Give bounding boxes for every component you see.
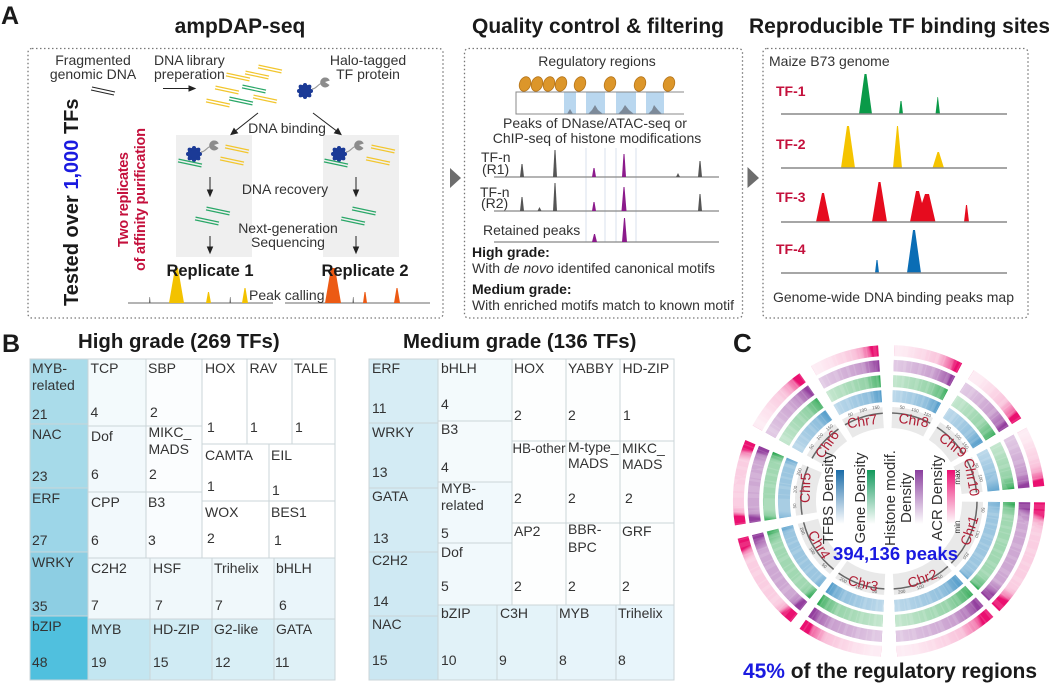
- cell: GATA: [274, 619, 335, 680]
- cell: YABBY: 2: [568, 407, 576, 423]
- sector: Chr3: 100: [855, 584, 864, 591]
- cell: MYB: 8: [559, 652, 567, 668]
- label: TF-1: TF-1: [776, 83, 806, 99]
- cell: Trihelix: [616, 605, 674, 680]
- panel: reproducible sites: [763, 48, 1028, 318]
- cell: GATA: GATA: [276, 621, 313, 637]
- chart: retained peaks: [592, 218, 627, 242]
- arrows: down: [208, 177, 358, 253]
- label: Chr2: Chr2: [905, 566, 939, 591]
- cell: RAV: [247, 359, 292, 444]
- sector: Chr10: 100: [977, 474, 984, 483]
- cell: TCP: TCP: [90, 360, 118, 376]
- cell: Dof: [88, 426, 146, 492]
- sector: Chr3: 50: [872, 589, 878, 594]
- sector: Chr2: [676, 288, 1049, 687]
- cell: BES1: 1: [274, 532, 282, 548]
- cell: EIL: EIL: [271, 447, 292, 463]
- cell: MYB: 19: [91, 654, 107, 670]
- cell: MYB: [557, 605, 616, 680]
- chart: replicate 1 peaks: [149, 268, 248, 303]
- cell: CPP: [88, 492, 146, 558]
- cell: SBP: [146, 359, 202, 426]
- sector: Chr7: 50: [847, 411, 854, 418]
- cell: bHLH: bHLH: [276, 560, 312, 576]
- arrow: step 1 to 2: [450, 168, 461, 188]
- cell: NAC: 23: [32, 468, 48, 484]
- cell: WRKY: WRKY: [32, 554, 75, 570]
- label: Chr9: Chr9: [936, 429, 970, 461]
- cell: WOX: [202, 501, 269, 558]
- cell: Dof: Dof: [441, 544, 463, 560]
- cell: MYB: MYB: [559, 605, 589, 621]
- cell: MYB-related: related: [32, 377, 75, 393]
- cell: WOX: 2: [207, 530, 215, 546]
- cell: M-type_MADS: MADS: [568, 455, 608, 471]
- cell: HSF: 7: [155, 597, 163, 613]
- sector: Chr8: [733, 345, 1045, 657]
- cell: HD-ZIP: [150, 619, 212, 680]
- cell: MYB-related: 21: [32, 406, 48, 422]
- chart: chromatin axis: [516, 92, 684, 114]
- legend text: TFBS density: TFBS Density: [820, 451, 837, 544]
- cell: MIKC_MADS: MIKC_: [148, 424, 192, 440]
- label: Chr10: Chr10: [961, 457, 983, 498]
- cell: EIL: 1: [272, 482, 280, 498]
- cell: NAC: 15: [372, 652, 388, 668]
- grey box: replicate 2: [323, 135, 399, 257]
- cell: C2H2: 7: [91, 597, 99, 613]
- cell: HOX: HOX: [205, 360, 236, 376]
- heading: medium grade: Medium grade (136 TFs): [403, 331, 636, 353]
- sector: Chr1: [737, 349, 1041, 653]
- sector: Chr2: 200: [898, 589, 906, 595]
- cell: GATA: [369, 488, 438, 552]
- chart: R1 peaks: [520, 150, 702, 177]
- label: TF-3: TF-3: [776, 189, 806, 205]
- cell: bHLH: bHLH: [441, 360, 477, 376]
- cell: M-type_MADS: M-type_: [568, 439, 619, 455]
- sector: Chr2: 150: [916, 583, 925, 591]
- cell: ERF: 11: [372, 400, 387, 416]
- cell: C2H2: C2H2: [372, 552, 408, 568]
- cell: YABBY: [566, 359, 620, 441]
- label: Chr3: Chr3: [847, 572, 880, 594]
- cell: SBP: SBP: [148, 360, 176, 376]
- label: TF-2: TF-2: [776, 136, 806, 152]
- cell: NAC: NAC: [372, 616, 402, 632]
- cell: MYB-related: [438, 480, 512, 543]
- cell: HD-ZIP: [620, 359, 674, 441]
- cell: bZIP: 10: [441, 652, 457, 668]
- circos plot: [676, 288, 1049, 687]
- cell: Dof: 5: [441, 578, 449, 594]
- text: TF-n R1: TF-n: [481, 149, 511, 165]
- cell: ERF: 27: [32, 532, 48, 548]
- panel label A: A: [1, 2, 19, 30]
- cell: TCP: 4: [90, 404, 98, 420]
- cell: BBR-BPC: BPC: [568, 539, 597, 555]
- cell: B3: 4: [441, 459, 449, 475]
- cell: Dof: 6: [91, 466, 99, 482]
- callout: regulatory regions: 45% of the regulatory regions: [743, 660, 1037, 683]
- cell: BBR-BPC: [566, 521, 620, 605]
- cell: HOX: [512, 359, 566, 441]
- cell: WRKY: [369, 423, 438, 488]
- chart: R2 peaks: [520, 183, 702, 211]
- sector: Chr9: 50: [945, 424, 952, 431]
- cell: B3: B3: [441, 421, 458, 437]
- sector: Chr5: 200: [796, 467, 803, 476]
- text: peaks caption: Peaks of DNase/ATAC-seq or: [503, 115, 687, 131]
- cell: Trihelix: Trihelix: [618, 605, 663, 621]
- treemap: high grade: [30, 359, 335, 680]
- cell: HB-other: HB-other: [512, 440, 566, 456]
- cell: YABBY: YABBY: [568, 360, 614, 376]
- sector: Chr5: [717, 329, 1049, 673]
- text: DNA binding: DNA binding: [248, 120, 326, 136]
- cell: HSF: [150, 558, 212, 619]
- cell: BBR-BPC: BBR-: [568, 521, 602, 537]
- chart: small accessibility peaks: [567, 105, 662, 114]
- icon: bound complex 1: [178, 140, 249, 167]
- sector: Chr7: [683, 295, 1049, 687]
- cell: MIKC_MADS: [146, 424, 202, 492]
- label: Chr5: Chr5: [796, 472, 814, 503]
- label: Chr1: Chr1: [957, 513, 982, 547]
- text: replicate 1: Replicate 1: [166, 262, 254, 280]
- legend bar: gene: [867, 470, 875, 524]
- cell: bZIP: 48: [32, 654, 48, 670]
- sector: Chr4: 200: [799, 526, 806, 536]
- cell: CPP: CPP: [91, 494, 120, 510]
- arrow: step 2 to 3: [748, 167, 759, 188]
- sector: Chr9: [681, 293, 1049, 687]
- cell: MIKC_MADS: MADS: [622, 456, 662, 472]
- chart baselines: [494, 177, 719, 242]
- sector: Chr8: 150: [923, 411, 932, 419]
- cell: HOX: HOX: [514, 360, 545, 376]
- sector: Chr7: 150: [872, 404, 880, 410]
- cell: MYB-related: 5: [441, 525, 449, 541]
- panel label B: B: [2, 330, 20, 358]
- text: regulatory regions: Regulatory regions: [538, 53, 656, 69]
- baseline: peak tracks: [128, 302, 430, 304]
- cell: ERF: ERF: [372, 360, 400, 376]
- heading: quality control: Quality control & filtering: [472, 15, 724, 38]
- cell: NAC: [369, 616, 438, 680]
- cell: MYB: [88, 619, 150, 680]
- cell: C3H: [497, 605, 557, 680]
- cell: C3H: C3H: [500, 605, 528, 621]
- cell: B3: B3: [148, 494, 165, 510]
- text: affinity purification: of affinity purification: [133, 128, 149, 271]
- text: fragmented DNA: genomic DNA: [50, 66, 137, 82]
- cell: TALE: TALE: [294, 360, 328, 376]
- legend text: max: max: [953, 469, 962, 485]
- cell: NAC: NAC: [32, 426, 62, 442]
- heading: reproducible sites: Reproducible TF binding sites: [749, 15, 1049, 38]
- cell: GRF: GRF: [622, 523, 652, 539]
- guide lines: [586, 148, 636, 242]
- cell: TALE: [292, 359, 335, 444]
- cell: TCP: [88, 359, 146, 426]
- cell: MYB: MYB: [91, 621, 121, 637]
- panel: quality control: [464, 48, 742, 318]
- icon: DNA fragment: [91, 87, 115, 95]
- cell: HOX: 2: [514, 407, 522, 423]
- cell: Dof: Dof: [91, 428, 113, 444]
- text: map caption: Genome-wide DNA binding peaks map: [773, 289, 1014, 305]
- cell: AP2: [512, 523, 566, 605]
- cell: M-type_MADS: 2: [568, 490, 576, 506]
- icon: bound complex 2: [324, 140, 395, 167]
- legend: density bars: [820, 450, 962, 546]
- text: Halo-tagged TF: TF protein: [336, 66, 400, 82]
- cell: GATA: GATA: [372, 488, 409, 504]
- cell: M-type_MADS: [566, 439, 620, 523]
- text: fragmented DNA: Fragmented: [55, 52, 131, 68]
- cell: GATA: 11: [275, 654, 290, 670]
- cell: MIKC_MADS: 2: [149, 466, 157, 482]
- cell: RAV: RAV: [250, 360, 278, 376]
- icon: DNA library: [206, 65, 282, 107]
- cell: MIKC_MADS: [620, 440, 674, 523]
- cell: ERF: [30, 488, 88, 552]
- text: medium grade: [472, 281, 734, 313]
- cell: C3H: 9: [499, 652, 507, 668]
- text: high grade: With de novo identifed canonical motifs: [472, 260, 715, 276]
- cell: bHLH: 6: [279, 597, 287, 613]
- cell: C2H2: 14: [373, 593, 389, 609]
- cell: SBP: 2: [150, 404, 158, 420]
- cell: MYB-related: [30, 359, 88, 424]
- sector: Chr3: 200: [839, 576, 848, 585]
- text: sequencing: Sequencing: [251, 234, 325, 250]
- cell: RAV: 1: [250, 419, 258, 435]
- cell: MYB-related: related: [441, 497, 484, 513]
- text: TF-n R2: (R2): [481, 195, 508, 211]
- label: Chr4: Chr4: [805, 527, 834, 562]
- baselines: [781, 114, 1007, 273]
- legend bar: histone: [915, 470, 923, 524]
- cell: MIKC_MADS: MADS: [148, 441, 189, 457]
- label: Chr7: Chr7: [846, 411, 879, 431]
- sector: Chr4: [677, 289, 1049, 687]
- sector: Chr1: 150: [974, 530, 981, 539]
- sector: Chr7: 100: [859, 407, 868, 414]
- icon: Halo-tagged TF protein: [297, 77, 330, 99]
- sector: Chr5: 100: [792, 485, 798, 494]
- cell: WRKY: [30, 552, 88, 616]
- cell: bZIP: [438, 605, 497, 680]
- sector: Chr10: [685, 297, 1049, 687]
- treemap: medium grade: [369, 359, 674, 680]
- cell: MIKC_MADS: MIKC_: [622, 440, 665, 456]
- cell: CPP: 6: [91, 532, 99, 548]
- callout: peaks count: 394,136 peaks: [833, 543, 958, 564]
- cell: G2-like: 12: [215, 654, 231, 670]
- cell: GRF: [620, 523, 674, 605]
- cell: Trihelix: 7: [215, 597, 223, 613]
- cell: HD-ZIP: HD-ZIP: [153, 621, 200, 637]
- legend text: gene density: Gene Density: [852, 452, 869, 543]
- cell: MYB-related: MYB-: [441, 480, 476, 496]
- cell: HOX: [202, 359, 247, 444]
- sector: Chr6: 150: [825, 423, 834, 432]
- sector: Chr4: 50: [821, 562, 828, 570]
- cell: MYB-related: MYB-: [32, 360, 67, 376]
- cell: HOX: 1: [207, 419, 215, 435]
- chart: open chromatin regions: [564, 92, 664, 114]
- arrows: DNA binding: [231, 113, 341, 134]
- text: DNA recovery: DNA recovery: [242, 181, 328, 197]
- sector: Chr1: 50: [980, 507, 986, 513]
- cell: NAC: [30, 424, 88, 488]
- text: tested over 1,000 TFs: Tested over 1,000 TFs: [61, 98, 83, 306]
- cell: C2H2: [369, 552, 438, 616]
- cell: B3: [438, 421, 512, 482]
- text: replicate 2: Replicate 2: [321, 262, 409, 280]
- sector: Chr9: 150: [961, 441, 970, 450]
- cell: bHLH: [438, 359, 512, 421]
- sector: Chr10: 50: [973, 462, 980, 469]
- legend text: ACR density: ACR Density: [929, 455, 946, 541]
- cell: WRKY: 35: [32, 598, 48, 614]
- icon: nucleosomes: [517, 75, 677, 93]
- heatmap banding texture: [764, 376, 1014, 626]
- legend bar: ACR: [947, 470, 955, 524]
- sector: Chr1: 250: [961, 551, 970, 561]
- label: TF-4: TF-4: [776, 241, 806, 257]
- cell: BBR-BPC: 2: [568, 578, 576, 594]
- sector: Chr8: 100: [911, 407, 920, 414]
- text: medium grade: With enriched motifs match to known motif: [472, 297, 734, 313]
- text: peaks caption: ChIP-seq of histone modifications: [493, 130, 701, 146]
- cell: WRKY: WRKY: [372, 424, 415, 440]
- panel label C: C: [733, 328, 752, 358]
- cell: EIL: [269, 444, 335, 501]
- cell: HD-ZIP: 15: [153, 654, 169, 670]
- cell: B3: 3: [148, 532, 156, 548]
- sector: Chr6: [684, 296, 1049, 687]
- chart: TF-4 peaks: [875, 230, 921, 273]
- cell: GRF: 2: [622, 578, 630, 594]
- cell: Trihelix: Trihelix: [214, 560, 259, 576]
- cell: ERF: [369, 359, 438, 423]
- text: peak calling: Peak calling: [249, 287, 324, 303]
- cell: CAMTA: [202, 444, 269, 501]
- text: two replicates: Two replicates: [116, 152, 132, 247]
- panel: ampDAP-seq workflow: [28, 48, 443, 318]
- text: high grade: High grade:: [472, 244, 550, 260]
- cell: AP2: 2: [514, 578, 522, 594]
- cell: Trihelix: [212, 558, 274, 619]
- heading: ampDAP-seq: ampDAP-seq: [175, 15, 305, 38]
- text: sequencing: Next-generation: [238, 220, 338, 236]
- cell: Trihelix: 8: [618, 652, 626, 668]
- sector: Chr6: 100: [815, 432, 825, 441]
- text: genome: Maize B73 genome: [769, 53, 890, 69]
- sector: Chr6: 50: [808, 443, 815, 450]
- cell: C2H2: [88, 558, 150, 619]
- cell: bZIP: [30, 616, 88, 680]
- cell: TALE: 1: [295, 419, 303, 435]
- cell: AP2: AP2: [514, 523, 541, 539]
- legend bar: TFBS: [836, 470, 844, 524]
- text: retained peaks: Retained peaks: [483, 222, 580, 238]
- sector: Chr2: 50: [937, 573, 944, 580]
- cell: C2H2: C2H2: [91, 560, 127, 576]
- text: medium grade: Medium grade:: [472, 281, 572, 297]
- cell: HD-ZIP: HD-ZIP: [622, 360, 669, 376]
- text: library preparation: preperation: [154, 66, 225, 82]
- sector: Chr4: 100: [808, 546, 817, 556]
- icon: recovered DNA: [195, 207, 376, 225]
- sector: Chr3: [731, 343, 1047, 659]
- legend text: histone modif: Histone modif.: [882, 450, 899, 546]
- cell: GATA: 13: [373, 530, 389, 546]
- text: high grade: [472, 244, 715, 276]
- text: TF-n R1: (R1): [482, 161, 509, 177]
- cell: G2-like: G2-like: [214, 621, 259, 637]
- chart: TF-2 peaks: [841, 126, 944, 168]
- sector: Chr5: 50: [792, 503, 797, 509]
- cell: BES1: [269, 501, 335, 558]
- cell: HD-ZIP: 1: [623, 407, 631, 423]
- grey box: replicate 1: [176, 135, 252, 257]
- sector: Chr8: 50: [899, 405, 905, 410]
- chart: TF-3 peaks: [816, 182, 969, 222]
- arrow: library preparation: [163, 86, 195, 91]
- heading: high grade: High grade (269 TFs): [78, 331, 280, 353]
- cell: B3: [146, 492, 202, 558]
- cell: MIKC_MADS: 2: [625, 490, 633, 506]
- cell: HB-other: 2: [514, 490, 522, 506]
- chart: replicate 2 peaks: [325, 268, 400, 303]
- label: Chr6: Chr6: [812, 427, 842, 461]
- cell: G2-like: [212, 619, 274, 680]
- legend text: density: Density: [898, 472, 915, 523]
- text: Halo-tagged TF: Halo-tagged: [330, 52, 406, 68]
- cell: BES1: BES1: [271, 504, 307, 520]
- sector: Chr9: 100: [954, 432, 963, 441]
- cell: bZIP: bZIP: [32, 618, 62, 634]
- cell: Dof: [438, 543, 512, 605]
- cell: bHLH: 4: [441, 396, 449, 412]
- cell: WOX: WOX: [205, 504, 239, 520]
- cell: bZIP: bZIP: [441, 605, 471, 621]
- cell: CAMTA: CAMTA: [205, 447, 254, 463]
- chart: TF-1 peaks: [859, 74, 940, 114]
- cell: HB-other: [512, 440, 566, 523]
- cell: HSF: HSF: [153, 560, 181, 576]
- cell: CAMTA: 1: [207, 478, 215, 494]
- cell: WRKY: 13: [372, 464, 388, 480]
- cell: bHLH: [274, 558, 335, 619]
- text: TF-n R2: TF-n: [480, 184, 510, 200]
- cell: ERF: ERF: [32, 490, 60, 506]
- legend text: min: min: [953, 521, 962, 533]
- text: library preparation: DNA library: [154, 52, 225, 68]
- label: Chr8: Chr8: [898, 410, 930, 430]
